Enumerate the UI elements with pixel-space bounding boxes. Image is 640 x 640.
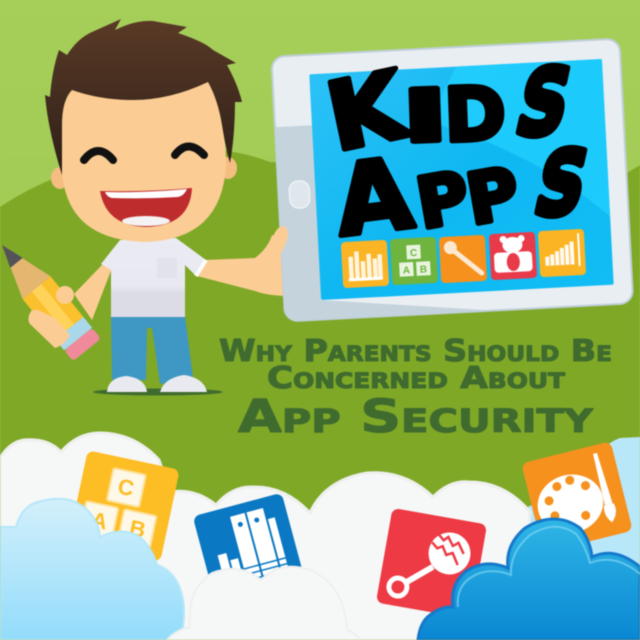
word: apps: P: [410, 156, 475, 245]
top teeth: [105, 189, 187, 198]
subtitle line 2: Concerned About: [267, 361, 566, 396]
home button: [289, 180, 310, 209]
left ear: [51, 167, 69, 189]
icon: blocks: A: [403, 265, 410, 277]
shirt pocket: [157, 258, 177, 278]
cloud: front left light blue: [0, 499, 184, 640]
word: kids: K: [318, 49, 418, 173]
right shoe: [160, 375, 207, 392]
left eye: [84, 151, 113, 160]
right ear: [219, 157, 237, 179]
subtitle: [219, 334, 612, 443]
icon: paint palette: [521, 441, 633, 553]
word: apps: A: [329, 137, 419, 259]
thumb: [272, 226, 288, 254]
sleeve cuff: [196, 260, 206, 276]
cloud: right light blue back: [502, 437, 640, 640]
word: kids: I: [401, 74, 449, 159]
pencil: [0, 234, 101, 361]
tablet frame: [271, 39, 633, 321]
left arm: [74, 265, 112, 320]
pants: [111, 316, 193, 384]
tongue: [122, 216, 170, 226]
icon: rattle: [439, 235, 487, 283]
icon: teddy bear: [489, 232, 537, 280]
word: apps: S: [527, 131, 597, 236]
cloud: front right blue: [418, 519, 640, 640]
icon: alphabet blocks: C: [116, 474, 136, 501]
icon: alphabet blocks: A: [89, 507, 110, 535]
green hill: [0, 148, 640, 640]
icon: alphabet blocks: B: [127, 515, 148, 543]
right arm and hand: [197, 235, 290, 296]
icon: abacus: [341, 240, 389, 288]
face: [62, 78, 226, 242]
subtitle line 3: App Security: [238, 390, 594, 443]
hand holding pencil: [28, 286, 74, 348]
tablet app icons: [341, 229, 586, 288]
title: kids apps: [318, 49, 597, 259]
icon: rattle: [376, 508, 487, 619]
tablet shaded bezel: [276, 117, 489, 321]
icon: xylophone: [538, 229, 586, 277]
shirt: [101, 238, 206, 317]
ground shadow: [93, 388, 223, 396]
tablet: [271, 39, 633, 321]
cloud: front center white: [167, 567, 361, 640]
word: apps: P: [460, 152, 525, 241]
word: kids: S: [508, 49, 580, 158]
icon: blocks: C: [410, 248, 418, 259]
tablet screen: [309, 59, 614, 300]
screen gloss: [426, 59, 610, 226]
mouth: [100, 188, 192, 227]
icon: blocks: B: [420, 264, 427, 276]
icon: blocks: [390, 237, 438, 285]
icon: alphabet blocks: [68, 450, 180, 562]
word: kids: [318, 49, 580, 173]
hair: [45, 19, 242, 175]
right eye: [175, 146, 204, 155]
word: kids: D: [443, 71, 507, 159]
character: boy: [0, 19, 290, 396]
word: apps: [329, 131, 597, 259]
left shoe: [107, 376, 147, 392]
cloud: white back: [0, 433, 530, 640]
icon: books: [193, 493, 305, 605]
cloud highlight: [458, 527, 640, 607]
subtitle line 1: Why Parents Should Be: [219, 334, 612, 369]
